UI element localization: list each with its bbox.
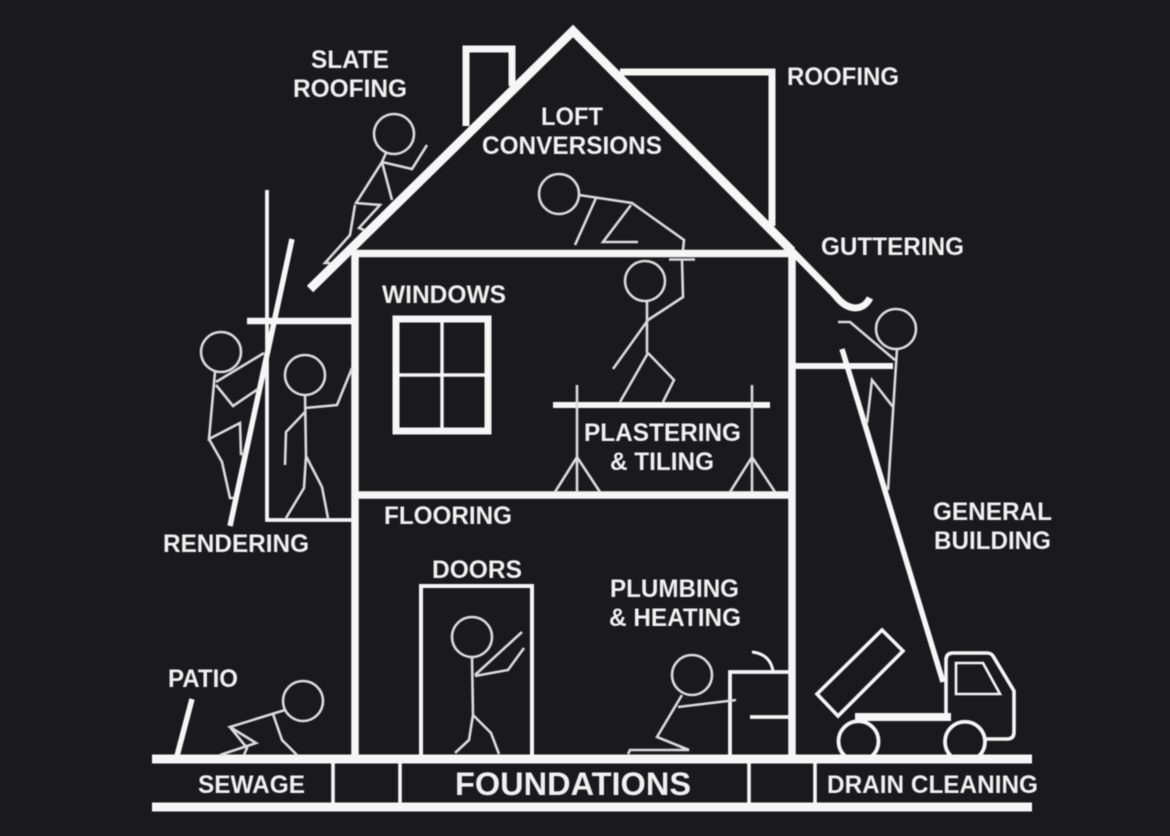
figure: rendering worker [285, 355, 352, 518]
label: general building [933, 499, 1052, 555]
wheels [839, 721, 985, 756]
roof [310, 31, 792, 289]
figure: plumber [628, 655, 736, 754]
scaffold left [177, 190, 355, 756]
truck [817, 630, 1014, 756]
label: drain cleaning: DRAIN CLEANING [827, 772, 1038, 799]
foundation dividers [333, 760, 815, 806]
label: plastering and tiling [584, 420, 741, 476]
window [396, 319, 488, 431]
label: general building: BUILDING [934, 528, 1051, 555]
label: slate roofing: ROOFING [293, 76, 407, 103]
label: flooring: FLOORING [384, 503, 512, 530]
label: sewage: SEWAGE [198, 772, 305, 799]
label: rendering: RENDERING [163, 531, 309, 558]
label: foundations: FOUNDATIONS [455, 766, 691, 802]
guttering platform and ladder [795, 349, 943, 682]
figure: slate roofer [325, 114, 427, 263]
label: plumbing and heating: PLUMBING [610, 576, 739, 603]
cab window [956, 663, 1000, 694]
label: patio: PATIO [168, 666, 238, 693]
label: loft conversions: CONVERSIONS [482, 133, 662, 160]
cab [946, 653, 1014, 739]
plumbing unit [730, 652, 790, 756]
label: plumbing and heating: & HEATING [609, 605, 741, 632]
label: guttering: GUTTERING [821, 234, 964, 261]
label: slate roofing: SLATE [311, 47, 389, 74]
scaffold platform [553, 385, 775, 492]
roof extension [620, 72, 772, 226]
figure: loft worker [539, 174, 684, 250]
walls and floors [352, 251, 795, 757]
door [421, 586, 532, 756]
label: roofing: ROOFING [787, 64, 899, 91]
label: plastering and tiling: & TILING [610, 449, 714, 476]
tipper [817, 630, 903, 716]
figure: patio layer [220, 681, 323, 755]
house structure [152, 31, 1032, 807]
truck bed [855, 713, 951, 721]
gutter [790, 249, 870, 308]
label: windows: WINDOWS [382, 282, 506, 309]
figure: door fitter [452, 617, 524, 754]
figure: plasterer [613, 260, 695, 402]
ground and foundation [152, 759, 1032, 807]
label: plumbing and heating [609, 576, 741, 632]
label: plastering and tiling: PLASTERING [584, 420, 741, 447]
figure: guttering worker [838, 309, 916, 490]
label: loft conversions: LOFT [541, 104, 603, 131]
label: slate roofing [293, 47, 407, 103]
label: general building: GENERAL [933, 499, 1052, 526]
label: doors: DOORS [432, 557, 522, 584]
figure: rendering climber [201, 332, 264, 498]
label: loft conversions [482, 104, 662, 160]
chimney [466, 49, 512, 126]
